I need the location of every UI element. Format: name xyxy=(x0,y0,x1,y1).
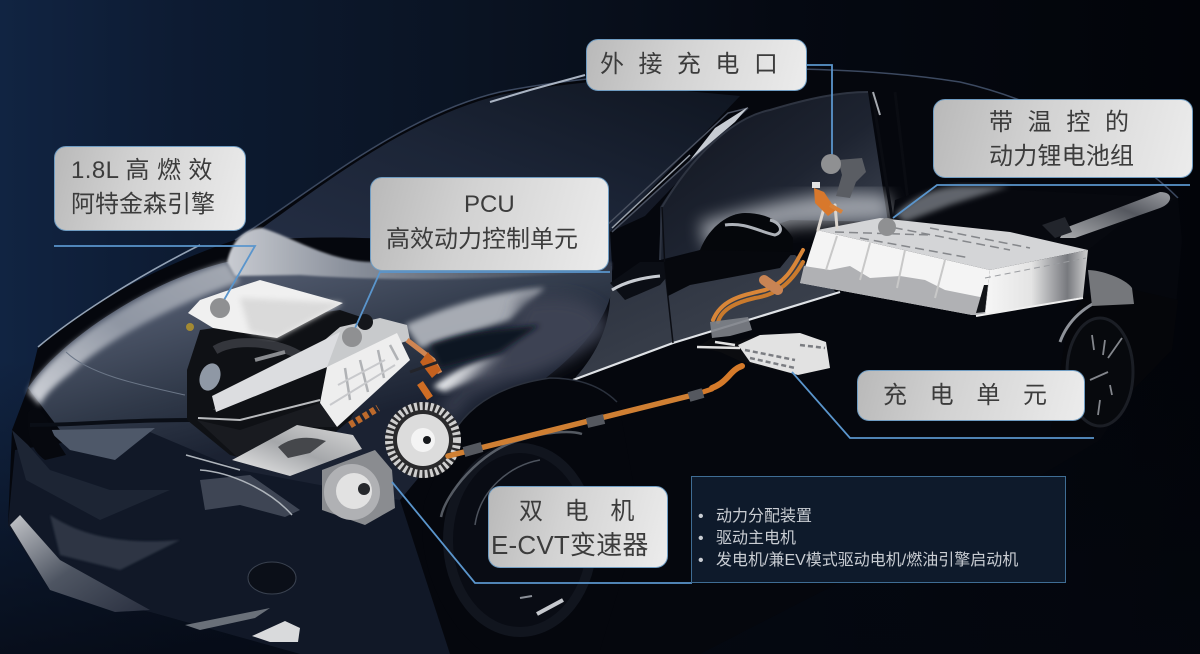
pointer lines xyxy=(54,65,1190,583)
charge port xyxy=(812,158,866,216)
dual motor line 1: 双 电 机 xyxy=(519,498,642,525)
windshield xyxy=(245,82,740,266)
top band xyxy=(213,318,410,410)
hood xyxy=(28,262,612,500)
body highlight streaks xyxy=(405,288,545,348)
engine cover xyxy=(188,280,343,338)
label: charging port xyxy=(586,39,807,91)
side glass and door xyxy=(573,92,1178,380)
pointer dots xyxy=(210,154,896,347)
rear dark panel xyxy=(892,186,1178,250)
charging unit xyxy=(697,317,830,375)
info panel: motor functions xyxy=(691,476,1066,583)
orange cables xyxy=(448,205,837,456)
item: generator: 发电机/兼EV模式驱动电机/燃油引擎启动机 xyxy=(716,552,1018,569)
PCU line 1: PCU xyxy=(464,191,515,218)
label: engine xyxy=(54,146,246,231)
generator rotor xyxy=(385,402,461,478)
engine line 1: 1.8L 高 燃 效 xyxy=(71,157,213,184)
battery line 2: 动力锂电池组 xyxy=(989,143,1134,170)
item: main motor: 驱动主电机 xyxy=(716,530,796,547)
engine line 2: 阿特金森引擎 xyxy=(71,191,215,218)
charging unit text: 充 电 单 元 xyxy=(883,382,1055,409)
charging port text: 外 接 充 电 口 xyxy=(600,51,782,78)
rear wheel xyxy=(1050,270,1178,435)
subframe xyxy=(200,475,300,517)
battery line 1: 带 温 控 的 xyxy=(989,109,1133,136)
PCU box xyxy=(320,333,410,427)
label: dual motor transmission xyxy=(488,486,668,568)
item: main motor: • xyxy=(698,530,704,547)
item: power split: • xyxy=(698,508,704,525)
label: PCU xyxy=(370,177,609,271)
item: power split: 动力分配装置 xyxy=(716,508,812,525)
transaxle xyxy=(232,425,362,476)
label: battery pack xyxy=(933,99,1193,178)
front wheel xyxy=(422,378,640,650)
label: charging unit xyxy=(857,370,1085,421)
mirror xyxy=(664,213,793,296)
engine and PCU and motors xyxy=(186,280,461,525)
headlight and lower slate xyxy=(48,428,155,460)
roof outline xyxy=(235,69,1178,240)
item: generator: • xyxy=(698,552,704,569)
orange leads xyxy=(407,340,440,373)
dual motor line 2: E-CVT变速器 xyxy=(491,530,649,560)
lower front side panel xyxy=(8,430,450,654)
PCU line 2: 高效动力控制单元 xyxy=(386,226,578,253)
battery pack xyxy=(800,218,1088,316)
drive motor xyxy=(322,450,395,525)
